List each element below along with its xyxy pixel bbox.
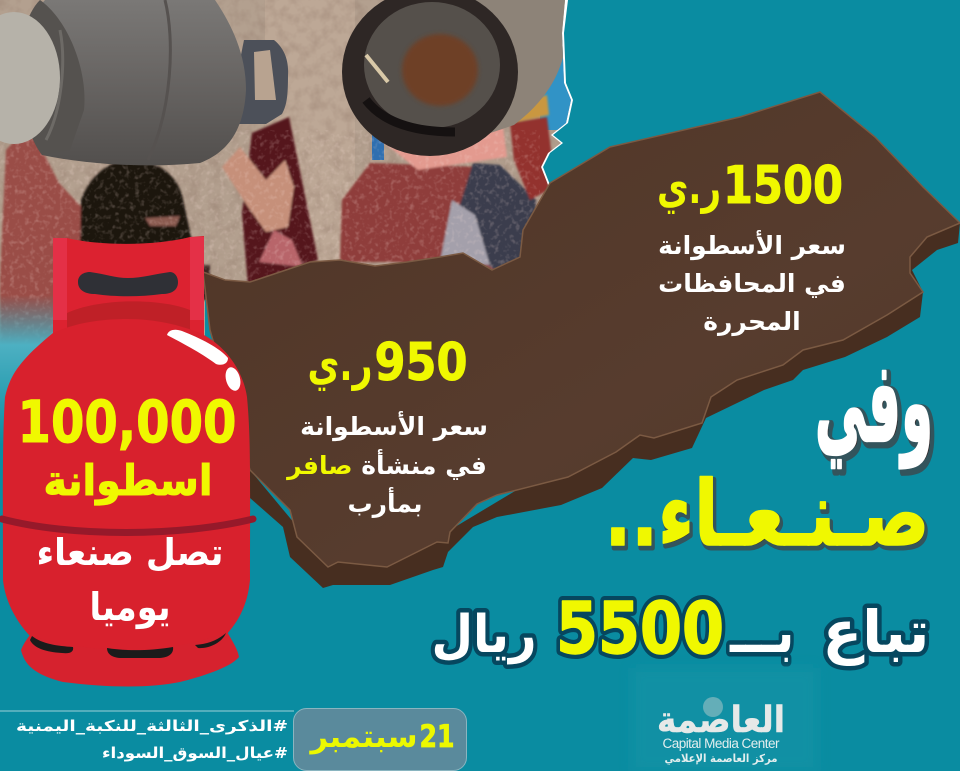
headline: sold for: بـــ [729, 598, 794, 666]
logo: Capital Media Center [662, 736, 780, 751]
cylinder text [18, 388, 236, 629]
map top surface [203, 92, 960, 567]
cylinder handle [53, 236, 204, 345]
base slots [107, 647, 173, 658]
label: 950 [285, 333, 488, 518]
logo [632, 668, 817, 771]
date badge: 21 [420, 719, 454, 755]
label: 1500: سعر الأسطوانة [658, 230, 846, 261]
slot backing [76, 270, 180, 298]
label: 1500: المحررة [703, 307, 801, 337]
cylinder text: تصل صنعاء [36, 531, 224, 574]
red gas cylinder [2, 236, 253, 686]
footer [0, 708, 466, 770]
label: 950: بمأرب [347, 487, 423, 518]
right woman [338, 94, 552, 270]
photo: women carrying gas cylinders [0, 0, 580, 445]
highlight [167, 330, 243, 392]
headline: 5500: 5500 [556, 587, 724, 670]
cylinder base [21, 632, 239, 686]
left cylinder [0, 0, 288, 165]
hashtags: #الذكرى_الثالثة_للنكبة_اليمنية [16, 717, 288, 735]
label: 1500 [657, 156, 846, 337]
label: 950: في منشأة صافر [285, 449, 487, 481]
left woman [0, 117, 318, 345]
hashtags: #عيال_السوق_السوداء [102, 744, 288, 762]
cylinder body [3, 319, 250, 654]
date badge: سبتمبر [309, 719, 418, 755]
label: 1500: في المحافظات [658, 269, 846, 298]
date badge [294, 708, 466, 770]
cylinder text: 100,000 [18, 388, 236, 456]
cylinder text: اسطوانة [44, 456, 212, 506]
map extruded side [250, 223, 960, 588]
label: 950: 950 [374, 333, 468, 393]
cylinder text: يوميا [90, 585, 170, 629]
headline [432, 337, 936, 670]
blue door patch [540, 40, 572, 130]
headline: 5500: 5500 [556, 587, 724, 670]
headline: sold for [729, 598, 930, 666]
hashtags [0, 711, 294, 762]
label: 950: ر.ي [308, 337, 372, 391]
logo: مركز العاصمة الإعلامي [664, 752, 778, 765]
seam band [2, 519, 253, 532]
headline: in: وفي [818, 340, 936, 472]
headline: riyal: ريال [432, 605, 536, 665]
right cylinder [342, 0, 567, 156]
label: 950: سعر الأسطوانة [300, 411, 488, 442]
headline: in: وفي [815, 337, 933, 469]
label: 1500: ر.ي [657, 160, 721, 214]
label: 1500: 1500 [723, 156, 843, 216]
logo: العاصمة [657, 700, 785, 741]
headline: sold for: تباع [822, 598, 930, 666]
map of Yemen [203, 92, 960, 588]
